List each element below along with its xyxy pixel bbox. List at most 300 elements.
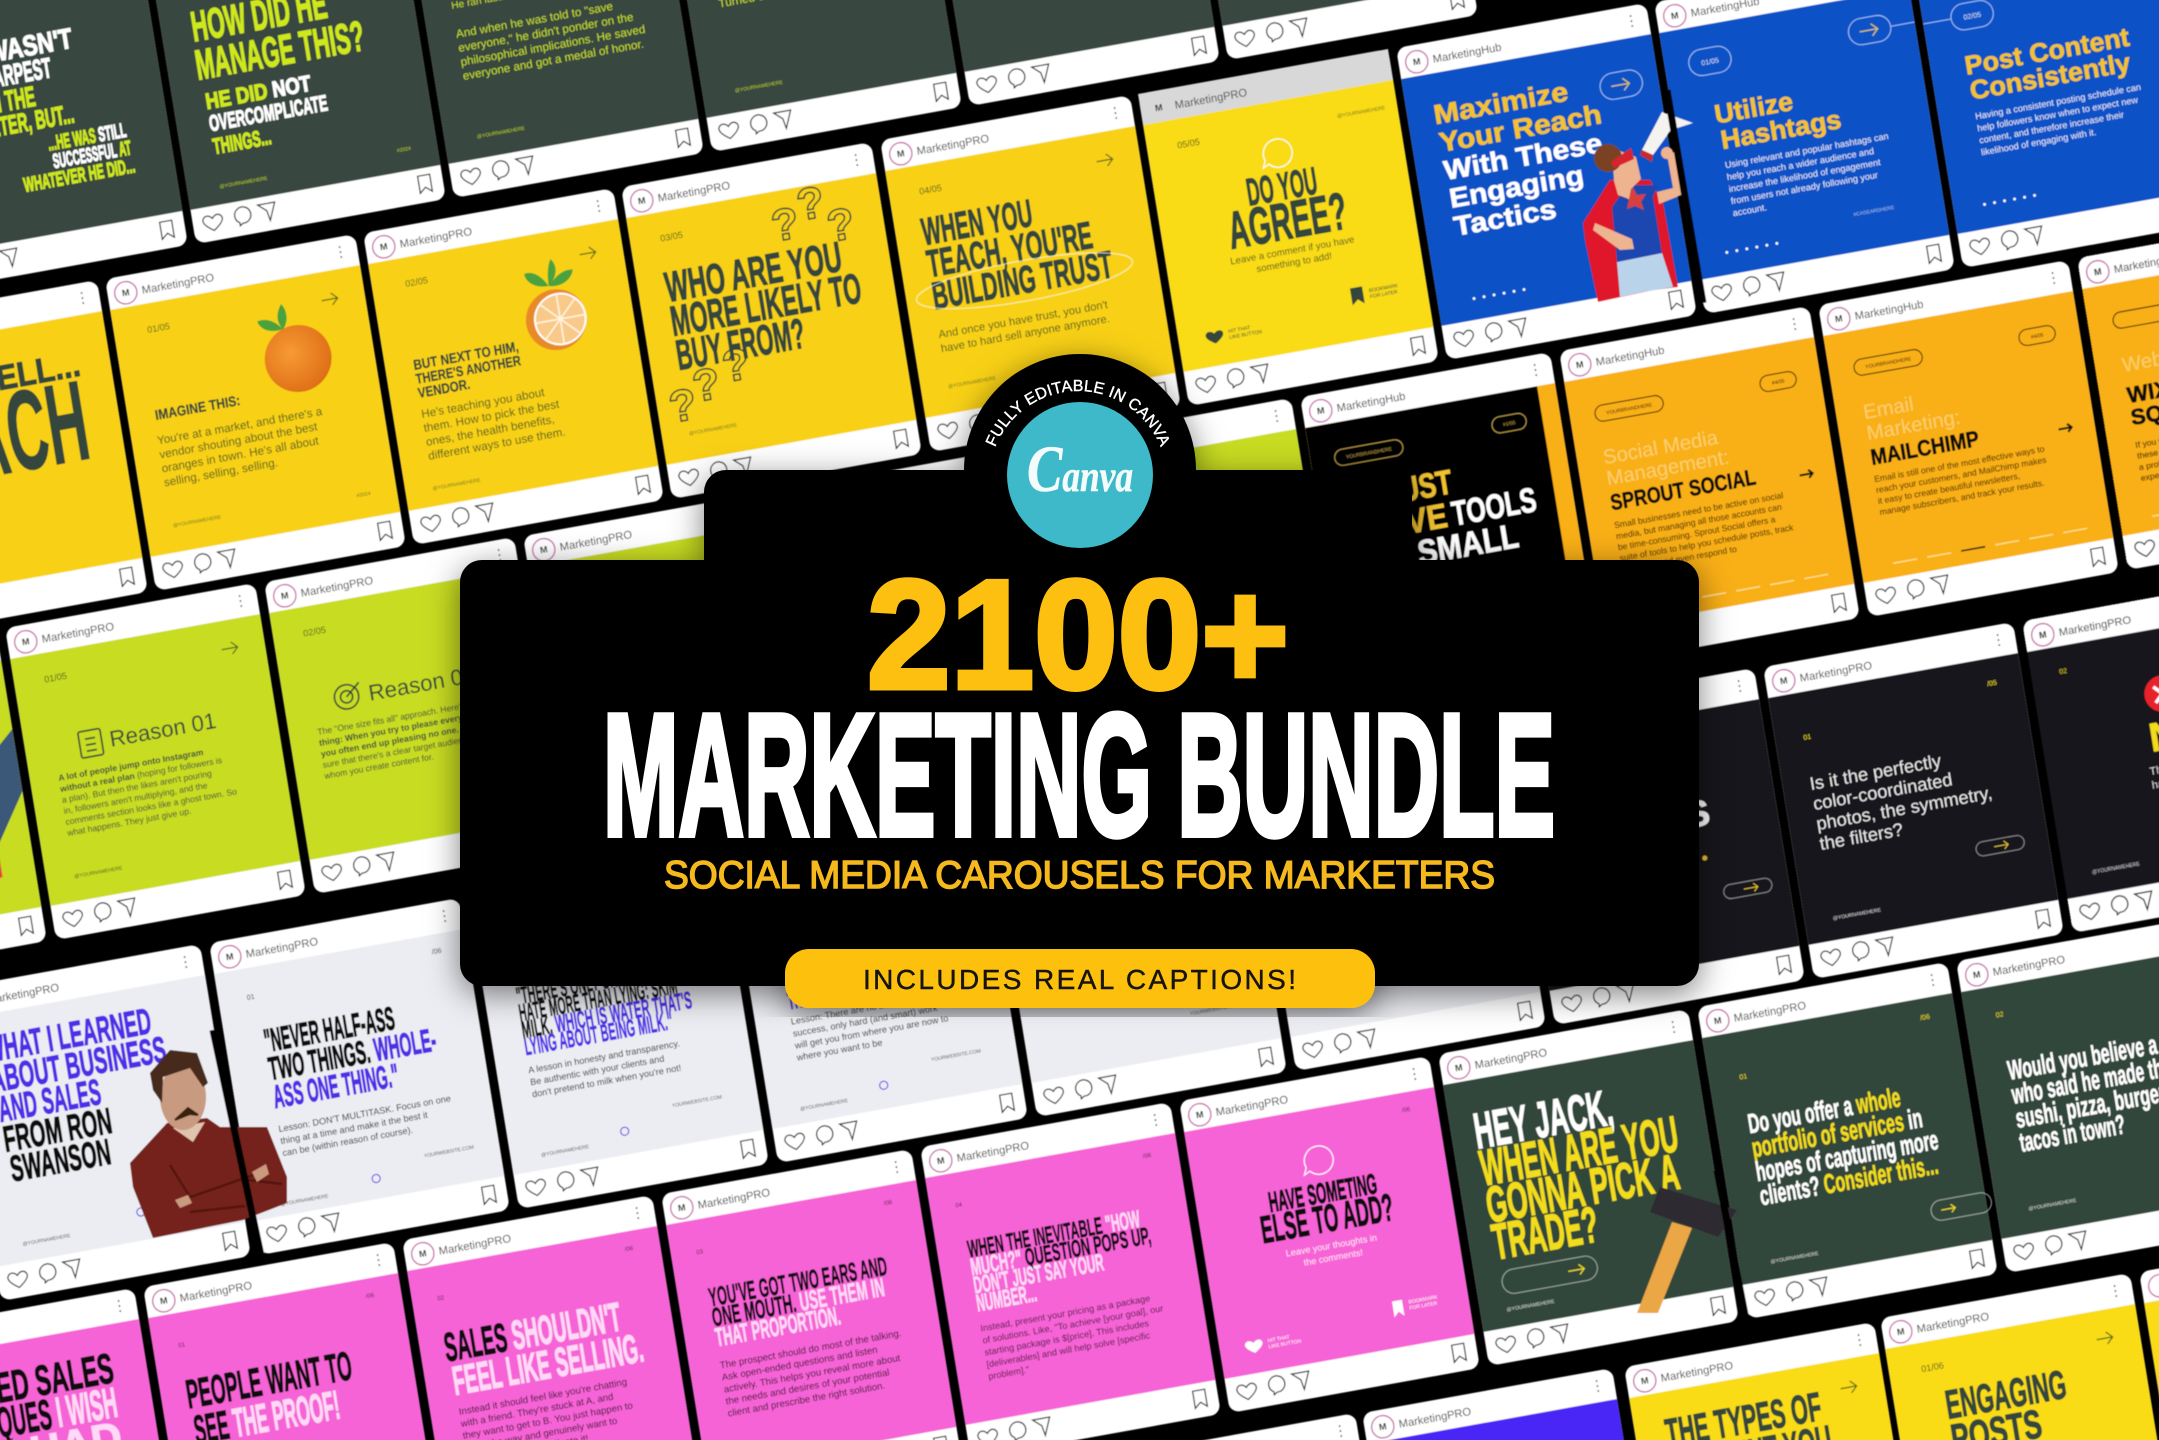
card: sales shouldn't feel like selling: MarketingPRO <box>438 1233 512 1258</box>
card: have something: MarketingPRO <box>1215 1094 1289 1119</box>
gutter over ron <box>213 1030 262 1260</box>
card: two ears one mouth: THAT PROPORTION. <box>713 1300 843 1353</box>
badge: fully editable in canva <box>985 380 1170 548</box>
card: utilize hashtags: Hashtags <box>1718 104 1843 155</box>
card: do you agree: something to add! <box>1256 251 1333 275</box>
card: have something: FOR LATER <box>1409 1301 1438 1312</box>
card: would you believe: @YOURNAMEHERE <box>2028 1198 2077 1212</box>
card: lime hidden 1: M <box>539 544 548 555</box>
card: skim milk: HATE MORE THAN LYING: SKIM <box>517 972 679 1027</box>
card: when you teach: M <box>896 148 905 159</box>
card: utilize hashtags: M <box>1670 10 1679 21</box>
card: people want proof <box>143 1242 444 1440</box>
card: utilize hashtags: #CASEARDHERE <box>1853 205 1895 218</box>
card: reason 01: @YOURNAMEHERE <box>74 865 123 880</box>
card: how much question: starting package is $[price]. This includes <box>984 1318 1150 1358</box>
icon: target <box>333 682 363 711</box>
card: must have tools: YOURBRANDHERE <box>1346 446 1393 461</box>
card: the types of: MarketingPRO <box>1660 1360 1734 1385</box>
card: another vendor: 02/05 <box>405 275 429 289</box>
card: never half-ass <box>209 898 510 1255</box>
card: sprout social: Management: <box>1605 447 1731 490</box>
card: people want proof: M <box>159 1295 168 1306</box>
icon: question marks: ? <box>719 339 753 392</box>
card: whole portfolio: MarketingPRO <box>1733 1000 1807 1025</box>
card: must have tools <box>1300 352 1601 709</box>
card: whole portfolio: @YOURNAMEHERE <box>1770 1251 1820 1265</box>
card: worked sales techniques <box>0 1288 185 1440</box>
card: mailchimp: #4/05 <box>2031 332 2044 341</box>
card: sprout social: Social Media <box>1602 427 1720 469</box>
card: who are you: BUY FROM? <box>673 310 808 380</box>
card: must have tools: M <box>1316 405 1325 416</box>
illustration: superhero boy with megaphone <box>1583 112 1693 302</box>
card: how much question: MarketingPRO <box>956 1140 1030 1165</box>
card: how did he manage this: #2024 <box>397 146 412 154</box>
card: when you teach: @YOURNAMEHERE <box>948 375 997 390</box>
card: gray hidden <box>986 760 1287 1117</box>
card: another vendor: VENDOR. <box>417 377 471 402</box>
card: saved everyone: everyone and got a medal of honor. <box>462 38 645 83</box>
card: people want proof: 01 <box>178 1341 186 1349</box>
card: sales shouldn't feel like selling: SALES SHOULDN'T <box>441 1294 624 1371</box>
card: gray hidden: YOURWEBSITE.COM <box>1190 1002 1240 1017</box>
card: how much question: [deliverables] and will help solve [specific <box>986 1330 1151 1370</box>
card: do you agree: LIKE BUTTON <box>1229 329 1263 341</box>
card: skim milk: A lesson in honesty and transparency. <box>527 1038 680 1075</box>
card: never half-ass: 01 <box>246 993 255 1002</box>
card: two ears one mouth: 03 <box>696 1248 704 1256</box>
panel: black title panel <box>460 354 1699 986</box>
card: do you agree: MarketingPRO <box>1174 87 1248 112</box>
card: skim milk: Be authentic with your clients and <box>529 1053 665 1087</box>
card: no shortcuts: success, only hard (and smart) work <box>792 1003 939 1039</box>
card: whole portfolio: M <box>1713 1015 1722 1026</box>
card: the types of <box>1624 1322 1925 1440</box>
card: who are you: WHO ARE YOU <box>661 233 845 312</box>
card: reason 01: A lot of people jump onto Instagram <box>58 747 204 783</box>
card: imagine this: selling, selling, selling. <box>163 456 279 489</box>
card: never half-ass: ASS ONE THING." <box>270 1057 401 1115</box>
card: another vendor: ones, the health benefits, <box>425 413 556 449</box>
card: mailchimp: it easy to create beautiful newsletters, <box>1877 471 2021 506</box>
card: post content consistently: Post Content <box>1963 22 2132 81</box>
card: mailchimp: manage subscribers, and track your results. <box>1879 478 2045 517</box>
card: imagine this: @YOURNAMEHERE <box>173 514 222 529</box>
card: have something <box>1179 1056 1480 1413</box>
card: when you teach: TEACH, YOU'RE <box>924 214 1096 286</box>
card: another vendor: THERE'S ANOTHER <box>415 353 522 388</box>
card: mailchimp: Email is still one of the most effective ways to <box>1873 444 2045 484</box>
card: utilize hashtags: from users not already following your <box>1730 170 1879 206</box>
card: who are you: MORE LIKELY TO <box>667 264 865 346</box>
card: whole portfolio: Do you offer a whole <box>1746 1081 1903 1139</box>
card: sprout social: suite of tools to help you schedule posts, track <box>1619 522 1795 563</box>
card: how much question: NUMBER... <box>974 1280 1039 1318</box>
card: turned out: @YOURNAMEHERE <box>735 80 784 94</box>
card: must have tools: MarketingHub <box>1336 391 1406 415</box>
card: two ears one mouth: M <box>677 1202 686 1213</box>
callout: includes real captions <box>785 949 1375 1008</box>
illustration: ron swanson figure <box>130 1050 287 1238</box>
card: lime hidden 1: MarketingPRO <box>559 529 633 554</box>
card: sprout social: analytics, and even respond to <box>1621 544 1738 574</box>
card: reason 02: MarketingPRO <box>300 575 374 600</box>
card: white footer <box>1177 0 1478 60</box>
card: never half-ass: can be (within reason of course). <box>282 1125 414 1158</box>
card: two ears one mouth: YOU'VE GOT TWO EARS AND <box>706 1251 889 1313</box>
card: when you teach: MarketingPRO <box>916 133 990 158</box>
card: sales shouldn't feel like selling <box>402 1195 703 1440</box>
card: sales shouldn't feel like selling: with a friend. They're stuck at A, and <box>459 1392 614 1430</box>
card: people want proof: PEOPLE WANT TO <box>183 1342 355 1417</box>
card: green footer <box>919 0 1220 106</box>
card: two ears one mouth: actively. This helps you reveal more about <box>723 1353 901 1396</box>
card: two ears one mouth: ONE MOUTH. USE THEM IN <box>710 1272 887 1333</box>
card: whole portfolio <box>1697 961 2003 1319</box>
card: sprout social: messages. <box>1622 568 1665 585</box>
subtitle: SOCIAL MEDIA CAROUSELS FOR MARKETERS <box>664 854 1495 897</box>
card: utilize hashtags: increase the likelihood of engagement <box>1728 157 1882 194</box>
card: hey jack: TRADE? <box>1488 1196 1602 1271</box>
card: no shortcuts: THERE ARE NO SHORTCUTS <box>786 962 940 1016</box>
row: white and dark cards <box>0 576 2159 1301</box>
card: when you teach: BUILDING TRUST <box>929 243 1116 318</box>
card: utilize hashtags: Using relevant and popular hashtags can <box>1724 131 1889 170</box>
card: never half-ass: @YOURNAMEHERE <box>280 1193 330 1208</box>
card: no shortcuts: Lesson: There are no shortcuts to <box>790 993 926 1027</box>
icon: question marks: ? <box>689 359 724 412</box>
card: never half-ass: /06 <box>431 947 442 956</box>
card: another vendor: different ways to use them. <box>427 425 566 463</box>
card: perfectly color-coordinated: Is it the perfectly <box>1808 750 1943 794</box>
card: how much question: problem]." <box>988 1364 1030 1382</box>
card: sprout social: M <box>1575 359 1584 370</box>
card: have something: HAVE SOMETING <box>1266 1168 1379 1219</box>
card: utilize hashtags <box>1654 0 1955 314</box>
card: sales shouldn't feel like selling: FEEL LIKE SELLING. <box>449 1324 647 1404</box>
card: have something: HIT THAT <box>1267 1334 1290 1344</box>
card: skim milk: "THERE'S ONLY ONE THING I <box>514 957 668 1010</box>
card: reason 01: 01/05 <box>44 671 68 685</box>
card: mailchimp: Email <box>1862 393 1915 424</box>
card: saved everyone <box>403 0 704 198</box>
card: lime hidden 1 <box>523 491 824 848</box>
card: perfectly color-coordinated: M <box>1779 675 1788 686</box>
card: maximize your reach: Maximize <box>1431 76 1570 130</box>
card: reason 01: what happens. They just give up. <box>66 806 192 838</box>
card: when you teach: And once you have trust, you don't <box>938 299 1110 341</box>
card: do you agree: HIT THAT <box>1228 325 1251 335</box>
card: have something: the comments! <box>1303 1247 1364 1268</box>
card: whole portfolio: hopes of capturing more <box>1753 1124 1940 1187</box>
card: how much question: DON'T JUST SAY YOUR <box>971 1249 1106 1300</box>
card: skim milk: MILK. WHICH IS WATER THAT'S <box>520 987 694 1044</box>
card: maximize your reach <box>1396 3 1697 360</box>
row: lime and amber cards <box>0 213 2159 986</box>
card: perfectly color-coordinated: color-coordinated <box>1811 768 1954 814</box>
card: have something: ELSE TO ADD? <box>1258 1186 1396 1252</box>
card: post content consistently: likelihood of engaging with it. <box>1980 127 2097 157</box>
card: utilize hashtags: Utilize <box>1712 86 1795 130</box>
card: two ears one mouth: client and prescribe the right solution. <box>727 1380 886 1420</box>
card: engaging posts <box>1880 1273 2159 1440</box>
card: red cross: MarketingPRO <box>2058 614 2132 639</box>
card: maximize your reach: MarketingHub <box>1432 42 1502 66</box>
card: hey jack: M <box>1454 1062 1463 1073</box>
card: dark partial: S <box>1682 791 1713 836</box>
callout: includes real captions: INCLUDES REAL CAPTIONS! <box>863 964 1296 995</box>
card: maximize your reach: M <box>1412 56 1421 67</box>
card: white bottom <box>1105 1413 1406 1440</box>
card: engaging posts: 01/06 <box>1921 1360 1945 1374</box>
card: mailchimp: MarketingHub <box>1854 299 1924 323</box>
card: mailchimp: Marketing: <box>1865 407 1962 445</box>
card: imagine this: IMAGINE THIS: <box>154 393 242 424</box>
card: sharpest <box>0 0 188 290</box>
row: pink and green cards <box>0 916 2159 1440</box>
card: how much question: Instead, present your pricing as a package <box>980 1293 1151 1334</box>
card: do you agree: Leave a comment if you have <box>1230 234 1355 268</box>
card: maximize your reach: Engaging <box>1447 159 1586 214</box>
card: whole portfolio: portfolio of services in <box>1749 1102 1924 1163</box>
card: who are you <box>621 142 922 499</box>
card: how much question: of solutions. Like, "To achieve [your goal], our <box>982 1303 1164 1346</box>
card: post content consistently <box>1912 0 2159 268</box>
card: when you teach: WHEN YOU <box>919 192 1035 254</box>
card: post content consistently: Consistently <box>1968 47 2133 106</box>
card: two ears one mouth: /06 <box>883 1199 893 1207</box>
card: how much question: M <box>936 1155 945 1166</box>
card: sales shouldn't feel like selling: M <box>418 1248 427 1259</box>
card: reason 01: Reason 01 <box>108 708 218 752</box>
card: perfectly color-coordinated <box>1763 622 2064 979</box>
card: how did he manage this: OVERCOMPLICATE <box>207 90 329 136</box>
card: reason 02: Reason 02 <box>367 662 477 706</box>
card: saved everyone: @YOURNAMEHERE <box>477 126 526 140</box>
card: no shortcuts <box>727 806 1028 1163</box>
card: do you agree: 05/05 <box>1177 137 1201 151</box>
card: mailchimp <box>1818 260 2119 617</box>
card: skim milk: @YOURNAMEHERE <box>541 1144 590 1159</box>
card: perfectly color-coordinated: @YOURNAMEHERE <box>1833 907 1882 922</box>
card: post content consistently: 02/05 <box>1963 11 1982 22</box>
card: rocket <box>0 629 47 986</box>
arc label: FULLY EDITABLE IN CANVA <box>985 380 1170 448</box>
card: how much question: /06 <box>1142 1152 1152 1160</box>
card: reason 01: comments section looks like a ghost town. So <box>65 786 238 827</box>
card: have something: Leave your thoughts in <box>1285 1232 1378 1259</box>
card: dark partial <box>1504 668 1805 1025</box>
card: mailchimp: MAILCHIMP <box>1869 426 1981 470</box>
icon: orange slice <box>516 254 591 355</box>
card: how much question <box>920 1102 1221 1440</box>
card: reason 02: you often end up pleasing no one. Make <box>320 720 483 759</box>
card: red cross <box>2022 576 2159 933</box>
card: never half-ass: MarketingPRO <box>245 936 319 961</box>
title: 2100+: 2100+ <box>867 548 1289 721</box>
card: ron swanson: FROM RON <box>0 1100 115 1160</box>
card: skim milk: LYING ABOUT BEING MILK." <box>522 1008 675 1061</box>
card: teach <box>0 280 148 637</box>
card: when you teach <box>880 95 1181 452</box>
gutter over hero <box>1667 90 1703 303</box>
icon: question marks: ? <box>823 199 858 252</box>
card: people want proof: /06 <box>365 1292 375 1300</box>
card: sprout social: Small businesses need to be active on social <box>1613 490 1784 530</box>
card: two ears one mouth: the needs and desires of your potential <box>725 1367 890 1408</box>
card: sprout social: #4/05 <box>1772 378 1785 387</box>
card: sharpest: ...HE WAS STILL <box>46 120 128 156</box>
card: saved everyone: everyone," he didn't ponder on the <box>457 11 634 55</box>
card: reason 02: M <box>280 590 289 601</box>
card: perfectly color-coordinated: photos, the symmetry, <box>1815 782 1994 834</box>
card: ron swanson: AND SALES <box>0 1071 104 1130</box>
card: sprout social: media, but managing all those accounts can <box>1615 502 1783 541</box>
card: lime hidden 3 <box>1041 398 1342 755</box>
card: when you teach: 04/05 <box>919 183 943 197</box>
card: never half-ass: YOURWEBSITE.COM <box>424 1145 474 1159</box>
card: perfectly color-coordinated: 01 <box>1803 733 1812 742</box>
card: saved everyone: philosophical implications. He saved <box>460 23 646 69</box>
card: hey jack: HEY JACK, <box>1470 1079 1617 1160</box>
card: have something: LIKE BUTTON <box>1268 1338 1302 1350</box>
card: sprout social: YOURBRANDHERE <box>1606 402 1653 416</box>
card: reason 02: thing: When you try to please everyone, <box>318 709 481 748</box>
card: hey jack: WHEN ARE YOU <box>1476 1105 1682 1197</box>
icon: question marks: ? <box>793 177 828 231</box>
icon: clipboard <box>78 728 104 758</box>
card: reason 02: The "One size fits all" approach. Here's the <box>317 698 480 737</box>
card: how did he manage this: HE DID NOT <box>204 71 313 114</box>
card: reason 02: sure that there's a clear target audience <box>322 733 473 770</box>
card: have something: /06 <box>1401 1106 1411 1114</box>
card: maximize your reach: With These <box>1441 127 1604 186</box>
card: utilize hashtags: account. <box>1732 202 1768 218</box>
card: purple bottom: M <box>1378 1421 1387 1432</box>
icon: question marks: ? <box>666 380 700 433</box>
card: must have tools: #1/05 <box>1503 420 1516 428</box>
card: skim milk: don't pretend to milk when you're not! <box>531 1063 682 1099</box>
card: sales shouldn't feel like selling: /06 <box>624 1245 634 1253</box>
card: perfectly color-coordinated: the filters? <box>1818 818 1904 854</box>
card: whole portfolio: /06 <box>1920 1013 1931 1022</box>
card: no shortcuts: will get you from where you are now to <box>793 1013 949 1051</box>
card: hey jack: GONNA PICK A <box>1482 1143 1683 1234</box>
card: have something: BOOKMARK <box>1408 1294 1439 1306</box>
card: skim milk <box>468 852 769 1209</box>
card: no shortcuts: where you want to be <box>795 1037 883 1063</box>
card: how much question: 04 <box>955 1201 963 1209</box>
card: another vendor: BUT NEXT TO HIM, <box>412 339 520 374</box>
card: edge bottom <box>2139 1227 2159 1440</box>
card: do you agree: BOOKMARK <box>1368 283 1399 294</box>
card: utilize hashtags: help you reach a wider audience and <box>1726 146 1875 182</box>
card: hey jack: @YOURNAMEHERE <box>1506 1299 1556 1313</box>
card: reason 01: in, followers aren't multiplying, and the <box>63 780 208 816</box>
card: lime hidden 2 <box>782 445 1083 802</box>
card: mailchimp: M <box>1834 313 1843 324</box>
card: reason 02: 02/05 <box>303 625 327 639</box>
card: the types of: M <box>1640 1375 1649 1386</box>
card: do you agree: DO YOU <box>1243 160 1320 215</box>
card: how much question: MUCH?" QUESTION POPS UP, <box>969 1223 1153 1282</box>
card: two ears one mouth <box>661 1149 962 1440</box>
card: two ears one mouth: MarketingPRO <box>697 1187 771 1212</box>
card: sprout social: SPROUT SOCIAL <box>1609 465 1758 515</box>
card: imagine this: M <box>121 287 130 298</box>
card: sales shouldn't feel like selling: Instead it should feel like you're chatting <box>458 1377 628 1418</box>
card: engaging posts: MarketingPRO <box>1916 1311 1990 1336</box>
card: hey jack <box>1438 1009 1739 1366</box>
card: another vendor: @YOURNAMEHERE <box>432 477 482 492</box>
card: have something: M <box>1195 1109 1204 1120</box>
card: saved everyone: And when he was told to "save <box>455 0 614 41</box>
card: perfectly color-coordinated: /05 <box>1987 679 1998 688</box>
card: turned out <box>661 0 962 152</box>
card: website builder: M <box>2093 266 2102 277</box>
card: two ears one mouth: The prospect should do most of the talking. <box>719 1328 902 1372</box>
card: who are you: 03/05 <box>660 230 684 244</box>
card: mailchimp: reach your customers, and MailChimp makes <box>1875 455 2047 495</box>
card: post content consistently: help followers know when to expect new <box>1976 95 2139 133</box>
card: no shortcuts: @YOURNAMEHERE <box>800 1098 849 1113</box>
card: would you believe: 02 <box>1995 1010 2004 1020</box>
card: red cross: 02 <box>2059 667 2068 676</box>
card: sharpest: WHATEVER HE DID... <box>22 155 137 197</box>
card: who are you: @YOURNAMEHERE <box>689 422 738 437</box>
row: dark green cards <box>0 0 1478 290</box>
canva logo <box>1007 402 1153 548</box>
card: must have tools: TOOLS <box>1449 481 1539 534</box>
card: who are you: M <box>637 195 646 206</box>
card: do you agree: @YOURNAMEHERE <box>1337 105 1386 120</box>
card: dark hidden <box>1245 714 1546 1071</box>
card: whole portfolio: 01 <box>1739 1072 1748 1082</box>
card: two ears one mouth: Ask open-ended questions and listen <box>721 1345 878 1384</box>
card: no shortcuts: YOURWEBSITE.COM <box>931 1048 981 1063</box>
card: reason 02: whom you create content for. <box>323 751 434 781</box>
card: imagine this: MarketingPRO <box>141 272 215 297</box>
card: sharpest: SUCCESSFUL AT <box>51 137 133 173</box>
card: who are you: MarketingPRO <box>657 180 731 205</box>
card: whole portfolio: clients? Consider this... <box>1757 1149 1940 1211</box>
card: reason 01: a plan). But then the likes aren't pouring <box>61 768 213 805</box>
card: imagine this: You're at a market, and there's a <box>156 405 324 447</box>
card: reason 02 <box>264 537 565 894</box>
card: hey jack: MarketingPRO <box>1474 1047 1548 1072</box>
card: reason 01: MarketingPRO <box>41 621 115 646</box>
row: bottom cards <box>1105 1227 2159 1440</box>
row: yellow and blue cards <box>0 0 2159 637</box>
card: another vendor: them. How to pick the best <box>423 398 561 435</box>
card: sprout social: be time-consuming. Sprout Social offers a <box>1617 514 1776 552</box>
card: ron swanson: @YOURNAMEHERE <box>22 1233 72 1248</box>
card: imagine this: oranges in town. He's all about <box>161 434 320 475</box>
card: ron swanson: SWANSON <box>7 1131 114 1189</box>
card: do you agree: AGREE? <box>1224 182 1351 261</box>
card: never half-ass: M <box>225 951 234 962</box>
card: purple bottom <box>1362 1368 1663 1440</box>
card: sprout social <box>1559 306 1860 663</box>
card: never half-ass: TWO THINGS. WHOLE- <box>266 1022 439 1087</box>
card: engaging posts: M <box>1896 1326 1905 1337</box>
card: would you believe <box>1956 916 2159 1273</box>
card: reason 01: without a real plan (hoping for followers is <box>58 755 223 794</box>
card: reason 01 <box>5 583 306 940</box>
card: must have tools: HAVE <box>1362 497 1450 549</box>
card: imagine this <box>105 234 406 591</box>
